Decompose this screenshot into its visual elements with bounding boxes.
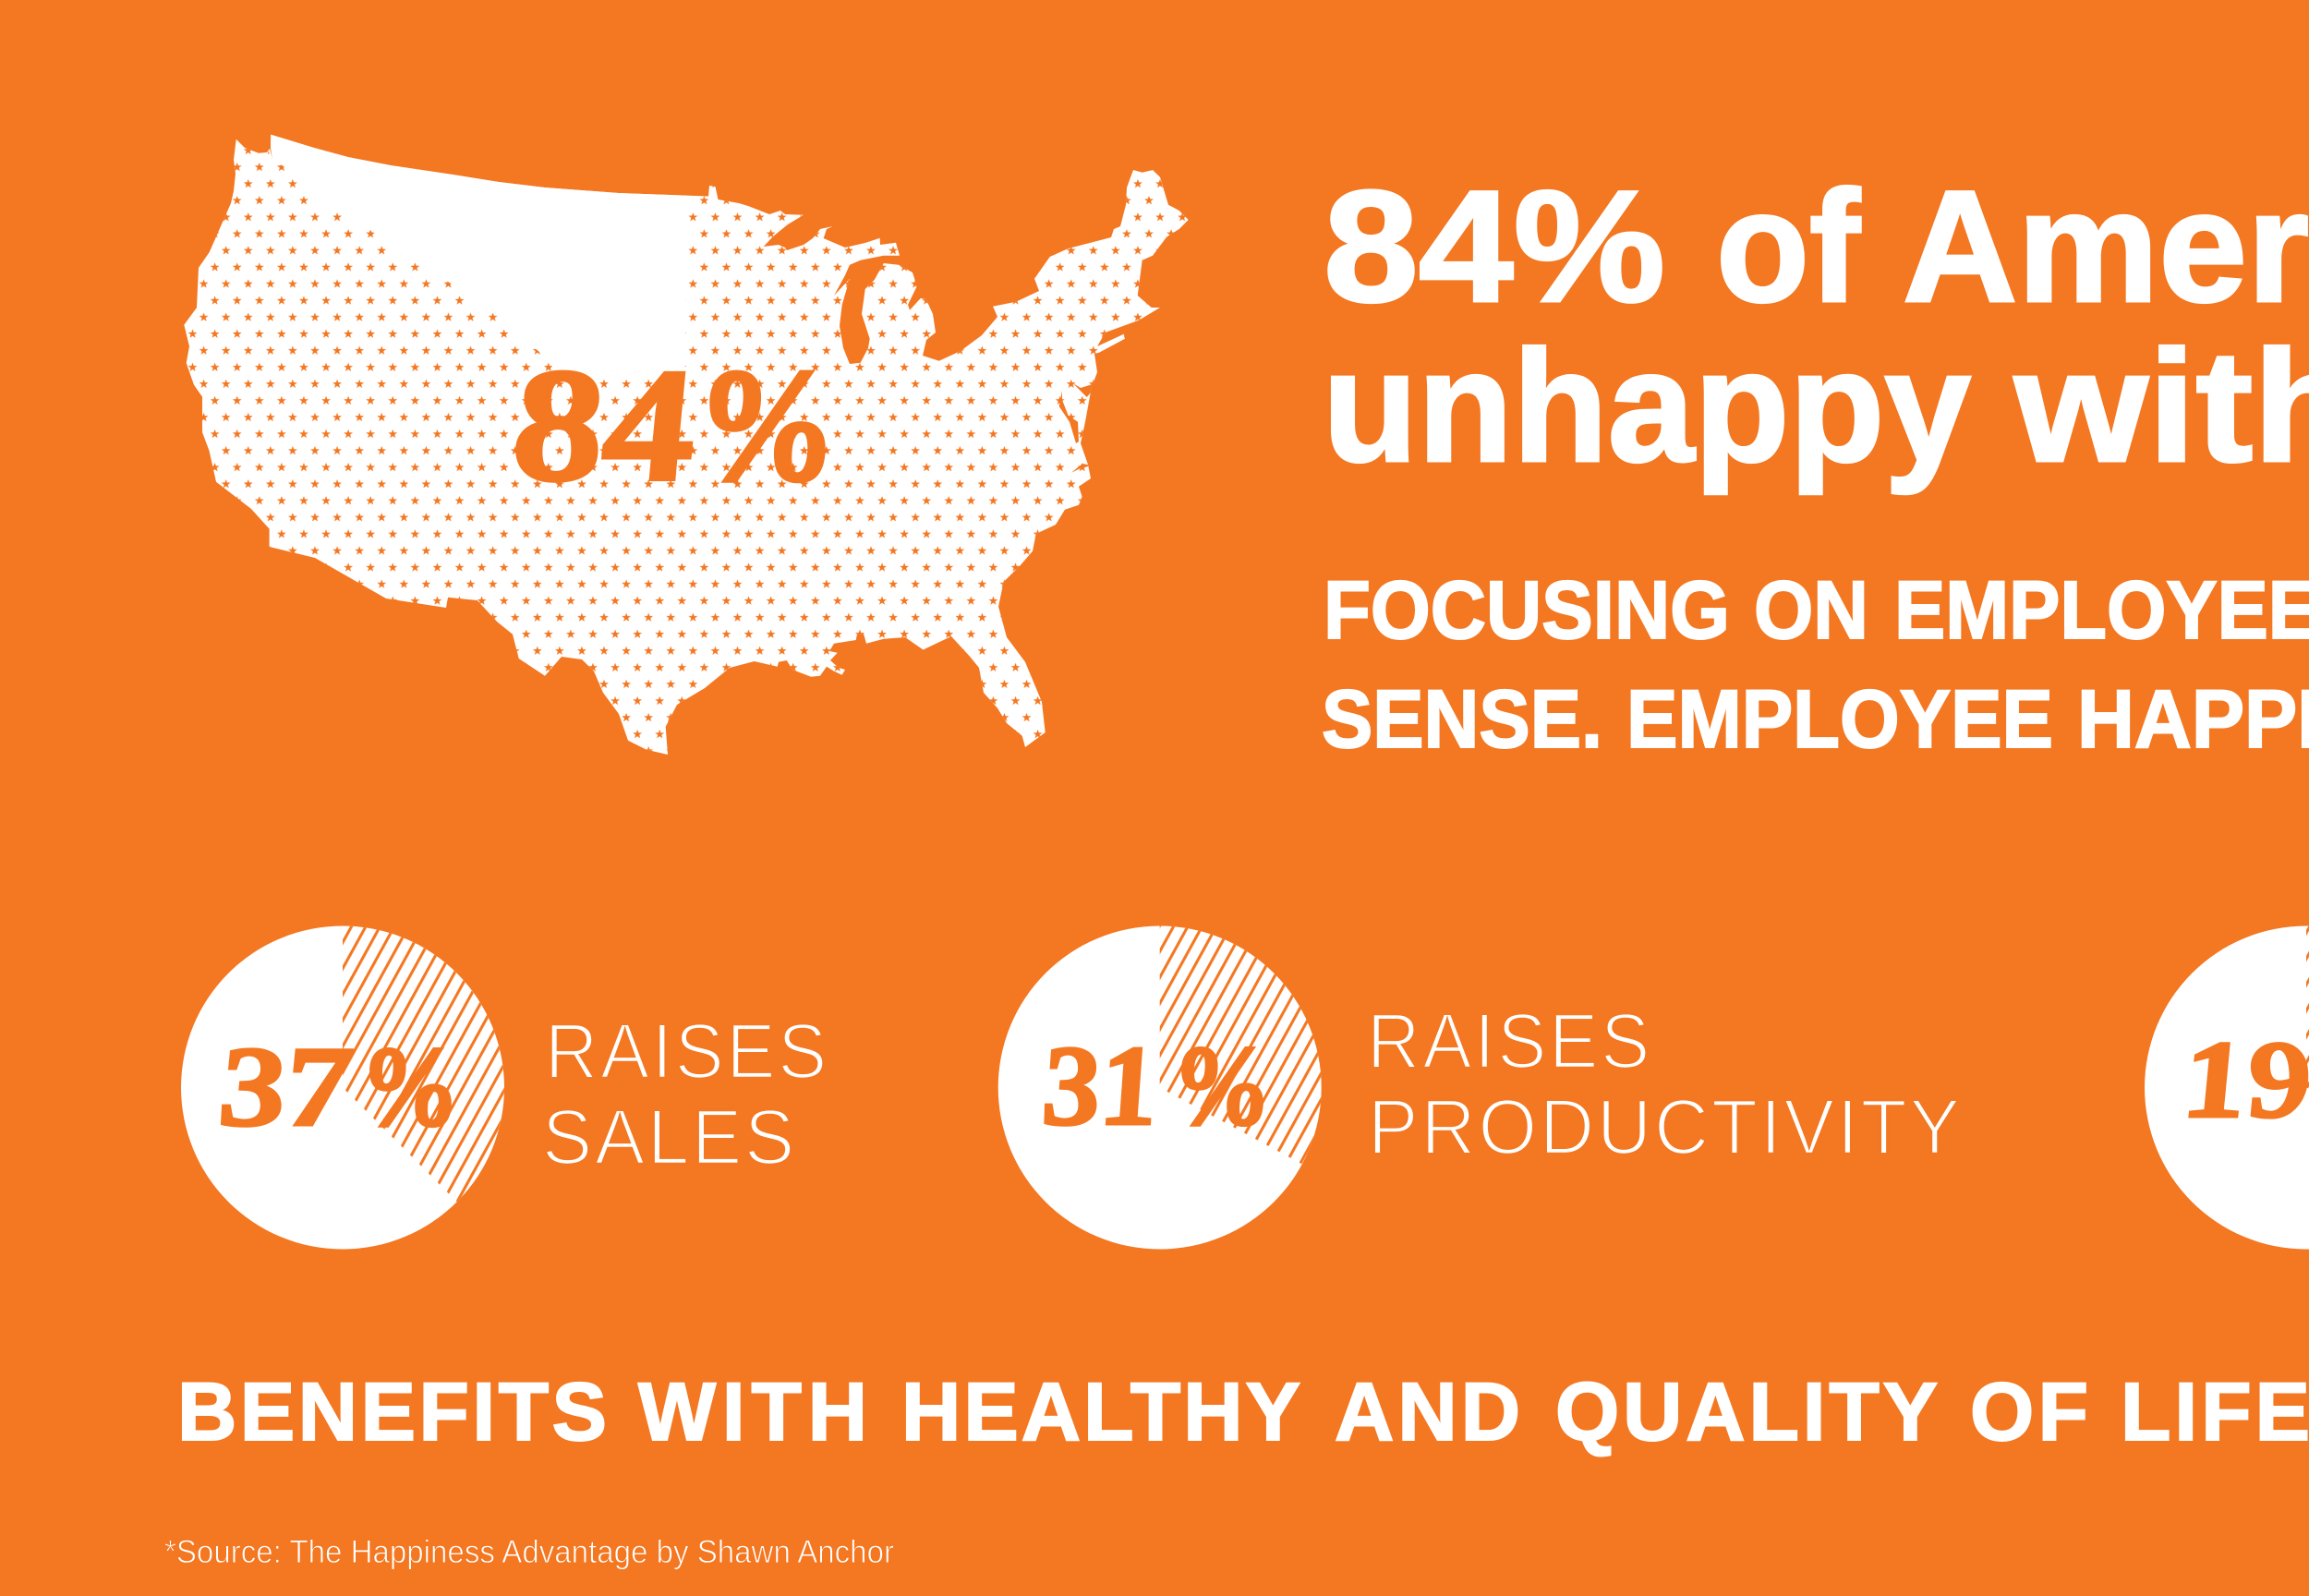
headline	[1323, 158, 2309, 495]
map of the United States with star pattern	[184, 135, 1189, 755]
pie chart: 19%	[2145, 925, 2309, 1249]
benefits heading: OF	[1970, 1365, 2088, 1457]
headline: of	[1716, 158, 1861, 335]
benefits heading: QUALITY	[1555, 1365, 1938, 1457]
label: raises sales: SALES	[542, 1094, 797, 1180]
pie value: 31%: %	[1170, 1022, 1273, 1149]
label: raises productivity: RAISES	[1367, 998, 1652, 1084]
subheading	[1322, 563, 2309, 765]
pie value: 19: 19	[2177, 1019, 2309, 1142]
map figure: 84%: 84	[502, 335, 704, 514]
benefits heading: BENEFITS	[177, 1365, 607, 1457]
benefits heading: HEALTHY	[901, 1365, 1300, 1457]
map figure: 84%	[502, 335, 839, 514]
pie chart: 31% raises productivity	[998, 925, 1322, 1249]
label: raises sales: RAISES	[545, 1008, 829, 1094]
subheading: EMPLOYEE	[1626, 672, 2053, 765]
source note: *Source: The Happiness Advantage by Shawn Anchor	[164, 1534, 894, 1570]
headline: unhappy	[1323, 318, 1971, 495]
headline: Amer	[1903, 158, 2309, 335]
benefits heading: LIFE	[2121, 1365, 2309, 1457]
pie value: 37%: 37	[212, 1022, 363, 1150]
subheading: ON	[1754, 563, 1868, 656]
benefits heading	[177, 1365, 2309, 1457]
pie value: 37%	[212, 1022, 461, 1150]
pie value: 31%	[1034, 1022, 1273, 1149]
label: raises productivity: PRODUCTIVITY	[1368, 1083, 1963, 1170]
map figure: 84%: %	[695, 335, 839, 514]
pie chart: 37% raises sales	[181, 925, 504, 1249]
pie value: 37%: %	[358, 1022, 461, 1150]
subheading: FOCUSING	[1324, 563, 1730, 656]
benefits heading: AND	[1335, 1365, 1520, 1457]
benefits heading: WITH	[638, 1365, 867, 1457]
label: raises productivity	[1367, 998, 1963, 1170]
pie value: 31%: 31	[1034, 1022, 1165, 1149]
label: raises sales	[542, 1008, 829, 1180]
headline: 84%	[1324, 158, 1665, 335]
subheading: SENSE.	[1322, 672, 1602, 765]
